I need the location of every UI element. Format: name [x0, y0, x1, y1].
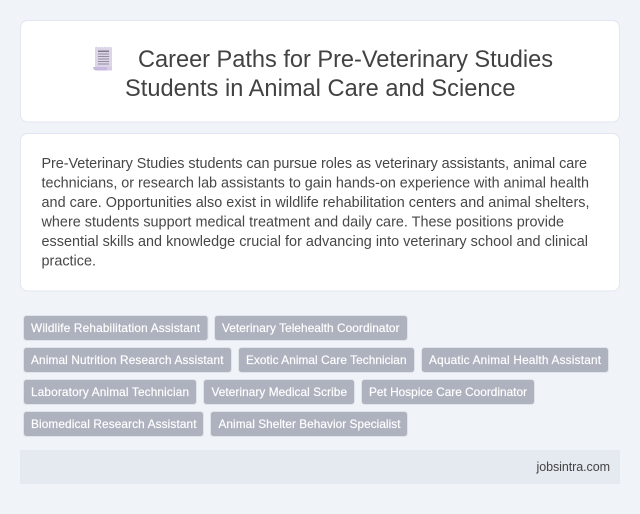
title: Career Paths for Pre-Veterinary Studies: [138, 47, 553, 73]
tag: Laboratory Animal Technician: [24, 380, 196, 404]
text block: description: practice.: [42, 254, 96, 270]
tag: Pet Hospice Care Coordinator: [362, 380, 534, 404]
tag: Exotic Animal Care Technician: [238, 348, 414, 372]
footer bar: [20, 450, 620, 484]
tag: Biomedical Research Assistant: [24, 412, 204, 436]
text block: description: technicians, or research lab assistants to gain hands-on experience with animal health: [42, 176, 589, 192]
panel: title header: [20, 20, 620, 122]
tag: Wildlife Rehabilitation Assistant: [24, 316, 208, 340]
tag: Animal Nutrition Research Assistant: Animal Nutrition Research Assistant: [31, 353, 224, 367]
text block: description: Pre-Veterinary Studies students can pursue roles as veterinary assistants, animal care: [42, 156, 587, 172]
tag: Wildlife Rehabilitation Assistant: Wildlife Rehabilitation Assistant: [31, 321, 201, 335]
text block: description: [40, 156, 590, 270]
panel: description: [20, 134, 620, 291]
tag: Veterinary Medical Scribe: [204, 380, 354, 404]
tag: Pet Hospice Care Coordinator: Pet Hospice Care Coordinator: [369, 385, 527, 399]
tag: Animal Shelter Behavior Specialist: [210, 412, 408, 436]
text block: description: essential skills and knowledge crucial for advancing into veterinary school and clinical: [42, 234, 588, 250]
tag: Aquatic Animal Health Assistant: Aquatic Animal Health Assistant: [429, 353, 602, 367]
tags: career paths: [24, 316, 608, 436]
title: [125, 47, 553, 102]
tag: Animal Shelter Behavior Specialist: Animal Shelter Behavior Specialist: [218, 417, 401, 431]
tag: Laboratory Animal Technician: Laboratory Animal Technician: [31, 385, 189, 399]
tag: Veterinary Telehealth Coordinator: Veterinary Telehealth Coordinator: [222, 321, 400, 335]
tag: Animal Nutrition Research Assistant: [24, 348, 232, 372]
tag: Veterinary Telehealth Coordinator: [214, 316, 408, 340]
title: Students in Animal Care and Science: [125, 76, 516, 102]
tag: Biomedical Research Assistant: Biomedical Research Assistant: [31, 417, 197, 431]
text block: description: where students support medical treatment and daily care. These positions provide: [40, 214, 564, 230]
tag: Veterinary Medical Scribe: Veterinary Medical Scribe: [212, 385, 347, 399]
footer source text: jobsintra.com: [536, 460, 610, 474]
text block: description: and care. Opportunities also exist in wildlife rehabilitation centers and animal shelters,: [42, 195, 590, 211]
icon: paper scroll: [93, 47, 112, 70]
tag: Aquatic Animal Health Assistant: [422, 348, 608, 372]
tag: Exotic Animal Care Technician: Exotic Animal Care Technician: [246, 353, 406, 367]
